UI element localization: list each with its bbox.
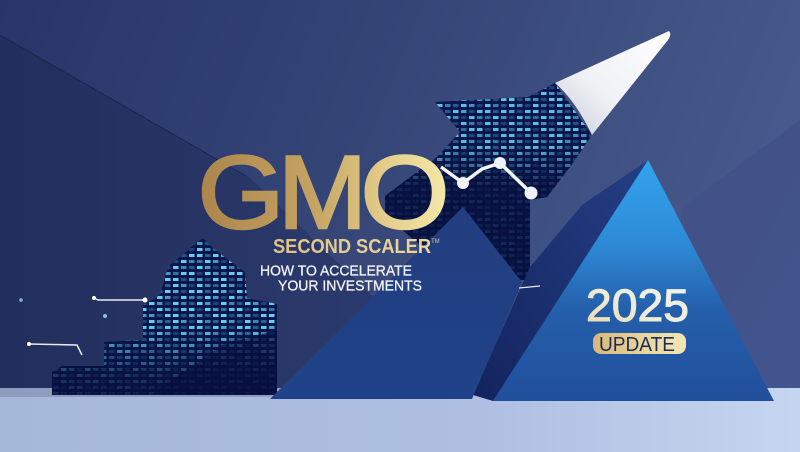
subtitle Second Scaler: SECOND SCALER	[273, 236, 431, 258]
dark back facet of pyramid	[473, 160, 648, 401]
white line chart	[441, 157, 538, 200]
title GMO: M	[278, 135, 367, 251]
year 2025: 2025	[586, 280, 689, 331]
floor	[0, 388, 800, 452]
update badge: UPDATE	[599, 334, 675, 356]
right wall facet	[650, 120, 800, 400]
arrow data-grid	[385, 83, 593, 280]
title GMO: O	[360, 135, 450, 251]
middle pyramid	[270, 207, 522, 399]
small dot left	[19, 298, 23, 302]
front pyramid	[493, 160, 774, 401]
title GMO	[198, 135, 450, 251]
small line marker lower	[27, 342, 82, 355]
small line marker upper	[92, 296, 148, 302]
trademark mark: TM	[431, 239, 440, 245]
diagonal thin line	[0, 35, 246, 176]
small white dash	[519, 286, 540, 288]
tagline line two: YOUR INVESTMENTS	[278, 278, 422, 294]
white arrow tip	[555, 31, 670, 135]
lower left wall facet	[0, 35, 480, 400]
tagline line one: HOW TO ACCELERATE	[260, 262, 412, 280]
title GMO: G	[198, 135, 284, 251]
small dot centre	[103, 314, 107, 318]
left data-grid city	[52, 238, 278, 396]
